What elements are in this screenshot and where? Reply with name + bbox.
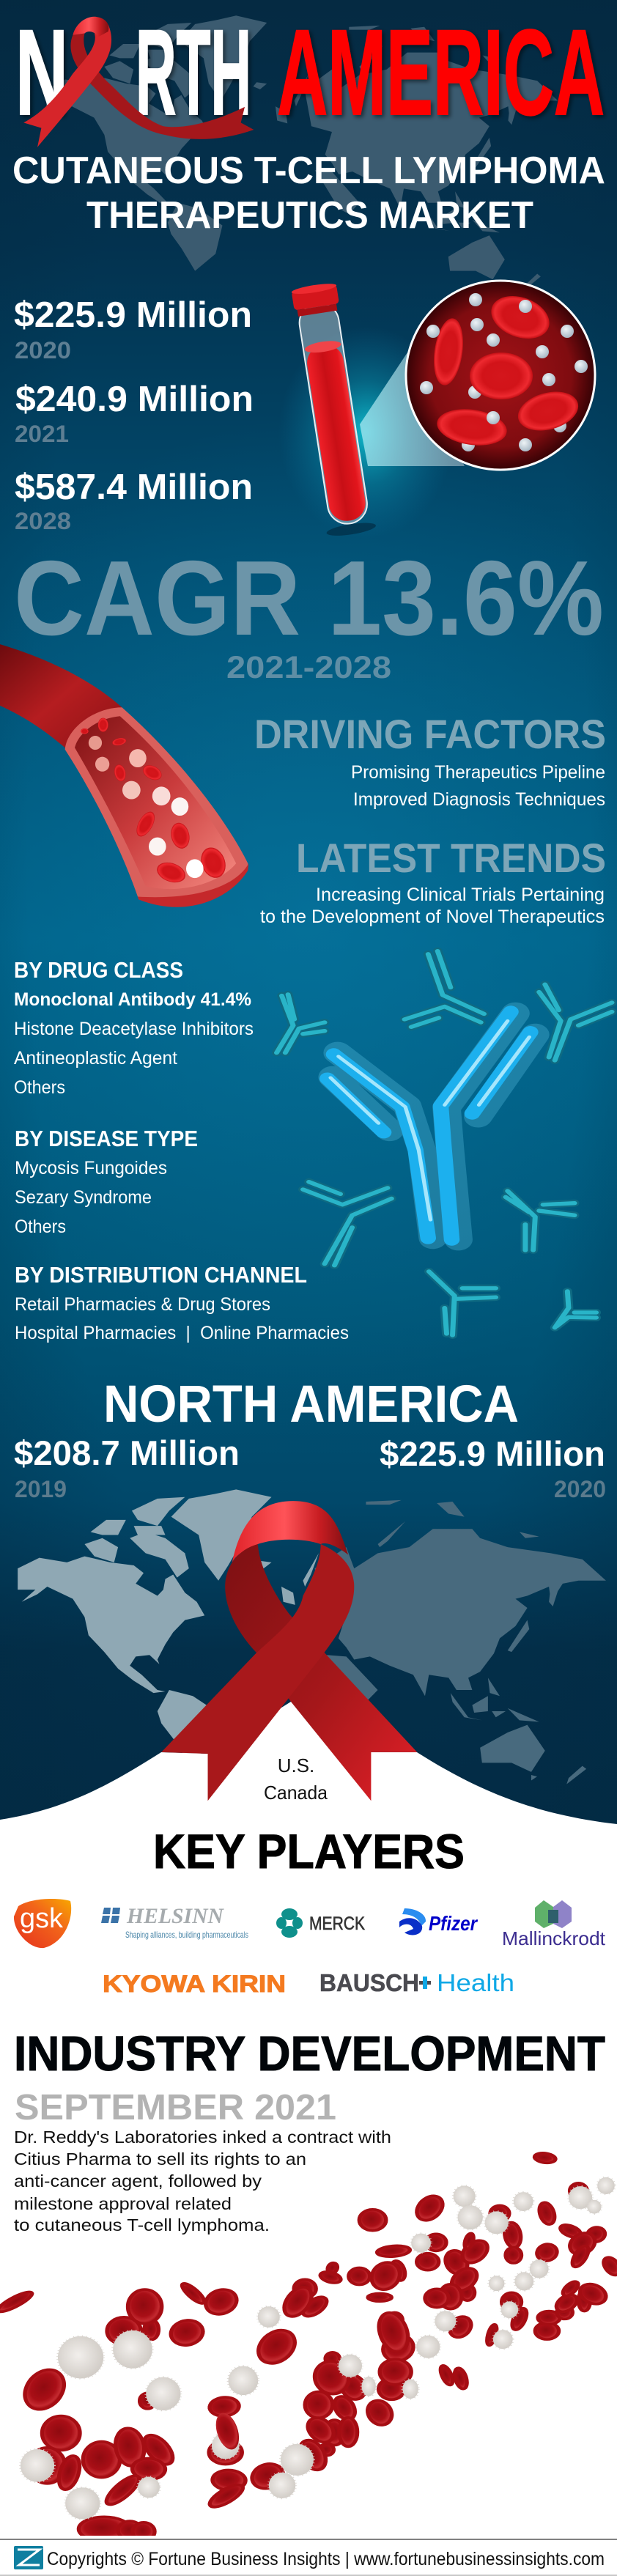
development date and text: milestone approval related bbox=[14, 2194, 232, 2213]
icon: blood cell magnifier circle bbox=[406, 281, 595, 470]
icon: blood test tube bbox=[289, 281, 377, 538]
logo: pfizer: Pfizer bbox=[429, 1912, 479, 1935]
driving factors: Promising Therapeutics Pipeline bbox=[351, 762, 605, 783]
latest trends bbox=[260, 835, 606, 927]
by distribution channel: Retail Pharmacies & Drug Stores bbox=[15, 1294, 270, 1315]
by distribution channel: Hospital Pharmacies | Online Pharmacies bbox=[15, 1323, 349, 1343]
by drug class bbox=[14, 957, 254, 1098]
icon: title ribbon bbox=[23, 17, 254, 147]
by drug class: Others bbox=[14, 1077, 65, 1098]
world map background bbox=[46, 15, 558, 291]
by drug class: Antineoplastic Agent bbox=[14, 1048, 177, 1069]
market values: 2020 bbox=[15, 337, 71, 363]
driving factors bbox=[254, 711, 606, 810]
market values bbox=[14, 295, 254, 534]
regional heading and values: 2020 bbox=[554, 1476, 606, 1502]
regional heading and values: $225.9 Million bbox=[380, 1434, 605, 1473]
latest trends: Increasing Clinical Trials Pertaining bbox=[316, 885, 605, 905]
development date and text: Citius Pharma to sell its rights to an bbox=[14, 2149, 306, 2169]
key players heading: KEY PLAYERS bbox=[153, 1824, 465, 1878]
by disease type bbox=[15, 1126, 198, 1237]
logo: helsinn bbox=[101, 1904, 248, 1940]
market values: 2021 bbox=[15, 421, 69, 447]
development date and text: SEPTEMBER 2021 bbox=[15, 2088, 336, 2127]
title: north america bbox=[15, 5, 605, 141]
market values: $240.9 Million bbox=[15, 380, 254, 419]
illustration: floating blood cells bbox=[0, 2152, 617, 2541]
subtitle: CUTANEOUS T-CELL LYMPHOMA bbox=[12, 150, 605, 192]
development date and text: to cutaneous T-cell lymphoma. bbox=[14, 2215, 270, 2234]
cagr heading: 2021-2028 bbox=[226, 650, 391, 685]
title: north america: N bbox=[15, 5, 68, 141]
footer bbox=[0, 2536, 617, 2576]
logo: mallinckrodt bbox=[502, 1900, 606, 1949]
logo: merck: MERCK bbox=[309, 1913, 365, 1934]
by drug class: BY DRUG CLASS bbox=[14, 957, 183, 983]
by disease type: Sezary Syndrome bbox=[15, 1187, 152, 1208]
logo: helsinn: Shaping alliances, building pharmaceuticals bbox=[125, 1930, 248, 1940]
countries list: U.S. bbox=[278, 1754, 314, 1776]
by drug class: Histone Deacetylase Inhibitors bbox=[14, 1019, 254, 1039]
regional heading and values bbox=[14, 1376, 606, 1502]
subtitle: THERAPEUTICS MARKET bbox=[86, 194, 533, 237]
by drug class: Monoclonal Antibody 41.4% bbox=[14, 989, 251, 1010]
market values: $225.9 Million bbox=[14, 295, 252, 335]
icon: glow and magnifier cone bbox=[278, 326, 465, 539]
logo: bausch health bbox=[319, 1969, 514, 1996]
icon: small antibodies bbox=[277, 951, 612, 1335]
by distribution channel: BY DISTRIBUTION CHANNEL bbox=[15, 1262, 307, 1288]
regional heading and values: NORTH AMERICA bbox=[103, 1376, 519, 1433]
icon: large awareness ribbon bbox=[161, 1501, 417, 1801]
world map bbox=[18, 1489, 606, 1784]
background panel bbox=[0, 0, 617, 1876]
by distribution channel bbox=[15, 1262, 349, 1343]
icon: large antibody bbox=[328, 1012, 535, 1239]
logo: bausch health: Health bbox=[437, 1969, 514, 1996]
title: north america: RTH bbox=[136, 5, 251, 141]
logo: mallinckrodt: Mallinckrodt bbox=[502, 1927, 606, 1949]
logo: kyowa kirin: KYOWA KIRIN bbox=[103, 1971, 286, 1997]
development date and text: anti-cancer agent, followed by bbox=[14, 2171, 262, 2191]
by disease type: Others bbox=[15, 1217, 66, 1237]
latest trends: to the Development of Novel Therapeutics bbox=[260, 907, 605, 927]
market values: 2028 bbox=[15, 508, 71, 534]
logo: gsk bbox=[14, 1899, 71, 1948]
by disease type: Mycosis Fungoides bbox=[15, 1158, 167, 1178]
subtitle bbox=[12, 150, 605, 237]
countries list bbox=[264, 1754, 328, 1804]
market values: $587.4 Million bbox=[15, 468, 253, 507]
logo: gsk: gsk bbox=[20, 1903, 64, 1934]
development date and text bbox=[14, 2088, 391, 2234]
by disease type: BY DISEASE TYPE bbox=[15, 1126, 198, 1151]
white lower page bbox=[0, 1702, 617, 2576]
countries list: Canada bbox=[264, 1782, 328, 1804]
regional heading and values: $208.7 Million bbox=[14, 1433, 240, 1472]
regional heading and values: 2019 bbox=[15, 1476, 67, 1502]
logo: pfizer bbox=[399, 1908, 479, 1935]
logo: helsinn: HELSINN bbox=[126, 1904, 224, 1928]
logo: bausch health: BAUSCH bbox=[319, 1969, 419, 1996]
driving factors: Improved Diagnosis Techniques bbox=[353, 789, 605, 810]
icon: blood vessel bbox=[0, 644, 248, 907]
development date and text: Dr. Reddy's Laboratories inked a contract with bbox=[14, 2127, 391, 2147]
logo: merck bbox=[276, 1908, 365, 1938]
